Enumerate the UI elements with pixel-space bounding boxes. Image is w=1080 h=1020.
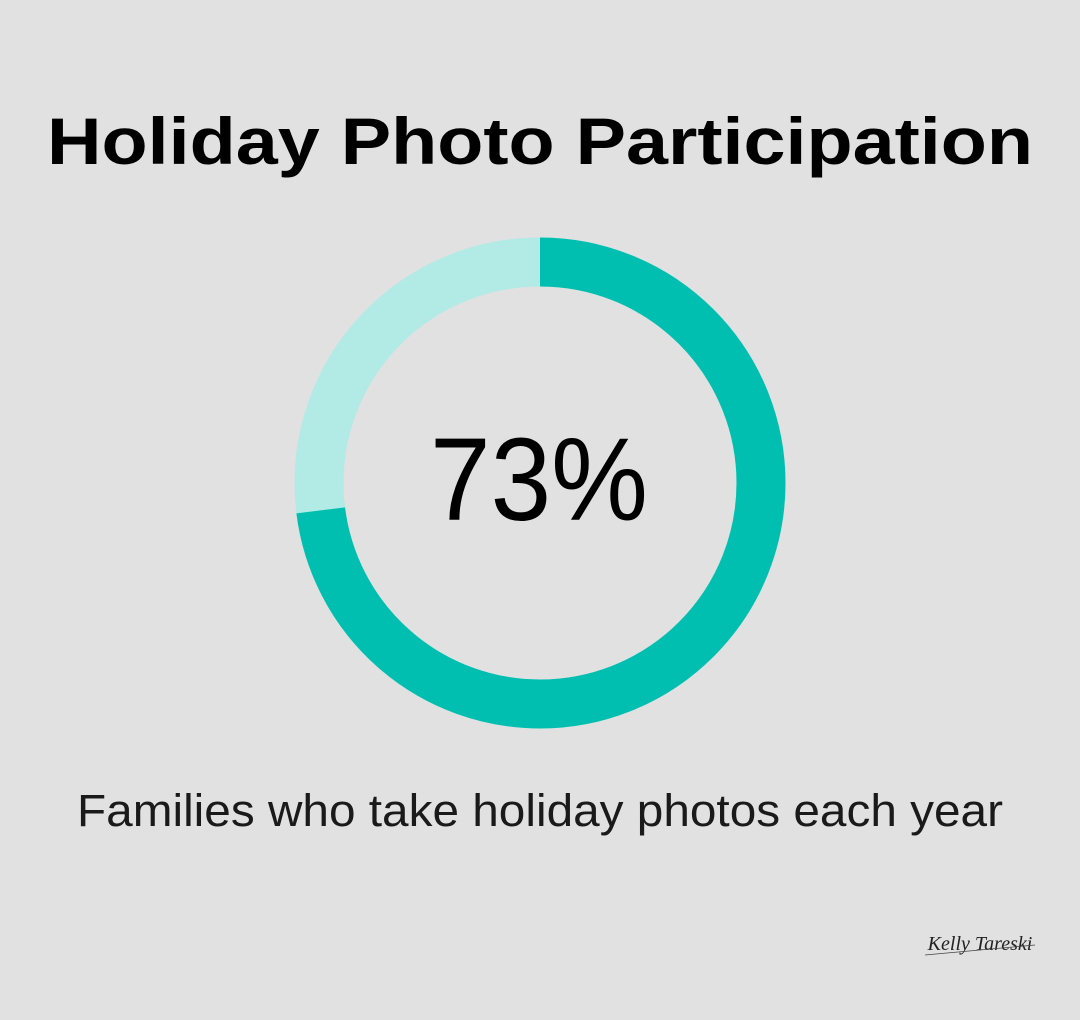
- logo signature: Kelly Tareski: [927, 933, 1032, 955]
- title: Holiday Photo Participation: [47, 104, 1033, 178]
- donut chart: 73%: [319, 262, 761, 704]
- center value: 73%: [430, 414, 648, 546]
- donut background segment (27%): [319, 262, 761, 704]
- donut value segment (73%): [319, 262, 761, 704]
- caption: Families who take holiday photos each year: [77, 785, 1003, 836]
